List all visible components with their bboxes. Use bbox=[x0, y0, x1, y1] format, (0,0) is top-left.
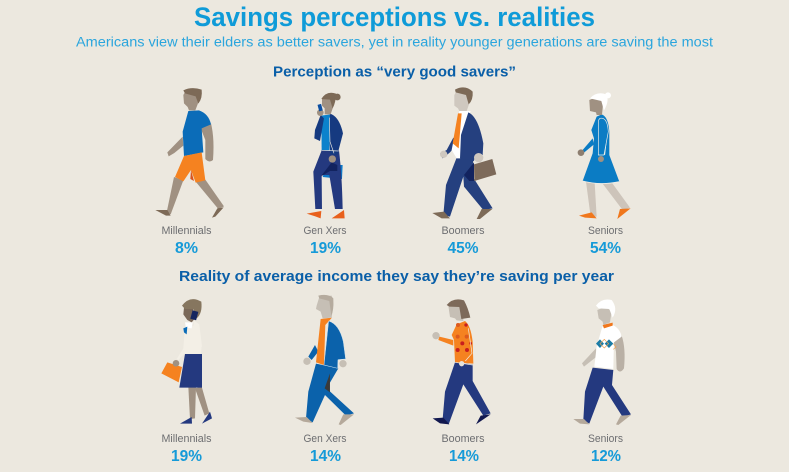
label and value: Boomers 45% bbox=[442, 225, 485, 257]
subtitle: Americans view their elders as better savers, yet in reality younger generations are saving the most bbox=[76, 34, 713, 50]
label and value: Gen Xers 19% bbox=[304, 225, 347, 257]
label and value: Gen Xers 19%: Gen Xers bbox=[304, 225, 347, 237]
label and value: Boomers 14%: Boomers bbox=[442, 433, 485, 445]
label and value: Millennials 19%: 19% bbox=[171, 448, 202, 465]
title: Savings perceptions vs. realities bbox=[194, 2, 595, 32]
label and value: Millennials 8%: 8% bbox=[175, 240, 198, 257]
label and value: Millennials 8%: Millennials bbox=[162, 225, 212, 237]
label and value: Seniors 54%: Seniors bbox=[588, 225, 623, 237]
label and value: Gen Xers 14%: 14% bbox=[310, 448, 341, 465]
heading: reality: Reality of average income they say they’re saving per year bbox=[179, 269, 614, 285]
label and value: Boomers 14% bbox=[442, 433, 485, 465]
figure: senior man in white sweater bbox=[573, 299, 631, 425]
label and value: Millennials 8% bbox=[162, 225, 212, 257]
label and value: Seniors 12%: 12% bbox=[591, 448, 621, 465]
label and value: Millennials 19%: Millennials bbox=[162, 433, 212, 445]
label and value: Boomers 45%: Boomers bbox=[442, 225, 485, 237]
label and value: Gen Xers 14%: Gen Xers bbox=[304, 433, 347, 445]
figure: gen x woman with phone and blue bag bbox=[307, 93, 345, 218]
heading: perception: Perception as “very good savers” bbox=[273, 64, 516, 80]
figure: boomer woman in orange patterned top bbox=[432, 299, 491, 424]
figure: millennial woman with orange bag bbox=[161, 299, 212, 424]
label and value: Seniors 12% bbox=[588, 433, 623, 465]
figure: millennial man in blue shirt and orange shorts bbox=[155, 88, 224, 218]
label and value: Boomers 14%: 14% bbox=[449, 448, 479, 465]
label and value: Seniors 12%: Seniors bbox=[588, 433, 623, 445]
figure: boomer man in suit with briefcase bbox=[432, 87, 496, 219]
label and value: Gen Xers 14% bbox=[304, 433, 347, 465]
figure: senior woman in blue dress bbox=[578, 92, 631, 219]
label and value: Millennials 19% bbox=[162, 433, 212, 465]
label and value: Boomers 45%: 45% bbox=[448, 240, 479, 257]
label and value: Gen Xers 19%: 19% bbox=[310, 240, 341, 257]
label and value: Seniors 54%: 54% bbox=[590, 240, 621, 257]
figure: gen x man in blue tracksuit bbox=[295, 295, 354, 425]
label and value: Seniors 54% bbox=[588, 225, 623, 257]
